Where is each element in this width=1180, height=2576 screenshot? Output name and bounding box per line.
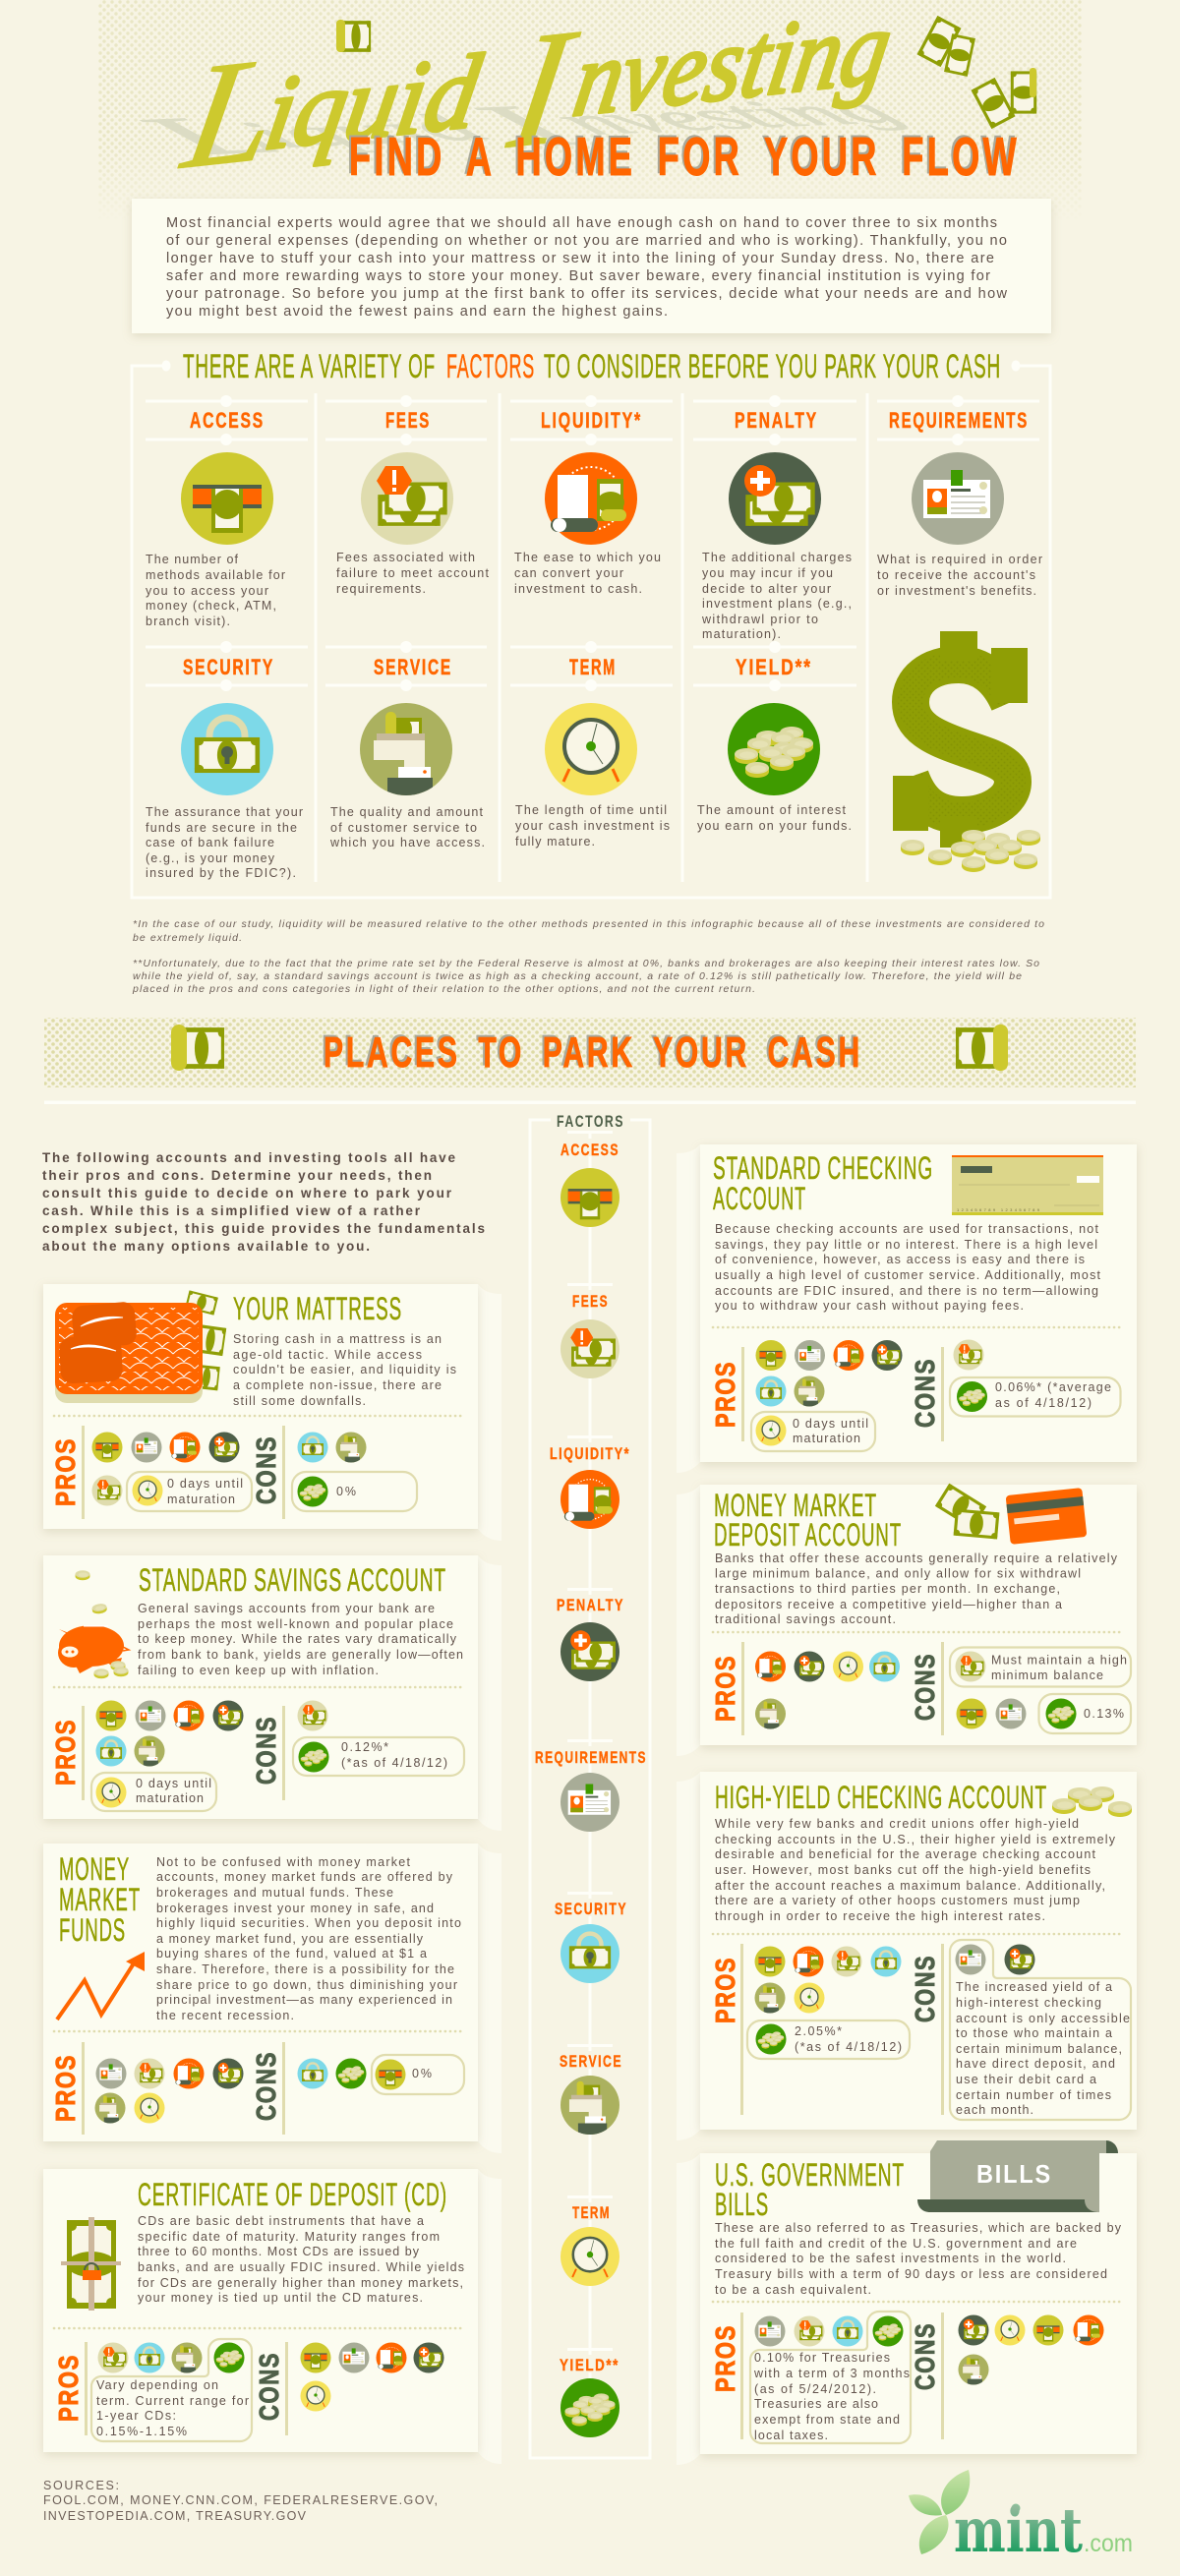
description: checking accounts in the U.S., their higher yield is extremely [715, 1833, 1116, 1846]
description: transactions to third parties per month. In exchange, [715, 1582, 1060, 1596]
legend: requirements [534, 1739, 648, 1832]
heading: ACCOUNT [713, 1181, 806, 1216]
legend: access [560, 1131, 620, 1227]
intro text box: safer and more rewarding ways to store your money. But saver beware, every financial institution is vying for [166, 268, 990, 284]
icon: coins [1052, 1786, 1132, 1817]
factor: access: The number of [146, 553, 239, 566]
section banner: places to park your cash: PLACES TO PARK YOUR CASH [324, 1028, 862, 1077]
heading: STANDARD SAVINGS ACCOUNT [139, 1562, 446, 1598]
sources: INVESTOPEDIA.COM, TREASURY.GOV [43, 2509, 307, 2523]
pros: PROS [50, 1437, 81, 1506]
factors column legend [530, 1112, 650, 2458]
description: a money market fund, you are essentially [156, 1932, 424, 1946]
cons: 0.06%* (*average [995, 1380, 1111, 1394]
legend: security: SECURITY [555, 1901, 627, 1918]
factor: penalty: maturation). [702, 627, 781, 641]
pros: 0 days until [136, 1777, 211, 1790]
factor: penalty: The additional charges [702, 551, 852, 564]
section banner: places to park your cash: PLACES TO PARK YOUR CASH [322, 1026, 860, 1075]
factor: requirements: What is required in order [877, 553, 1042, 566]
factor: penalty: decide to alter your [702, 582, 831, 596]
panel: money market funds [43, 1844, 502, 2153]
icon: floating bills left [336, 20, 371, 52]
cons: CONS [251, 2051, 281, 2121]
factor: security: SECURITY [183, 655, 274, 679]
factor: term: The length of time until [515, 803, 667, 817]
section banner: places to park your cash [44, 1018, 1136, 1087]
cons: CONS [254, 2352, 284, 2421]
title shadow: I [425, 93, 633, 158]
pros [710, 1944, 910, 2115]
heading: BILLS [715, 2187, 769, 2222]
heading [59, 1851, 141, 1948]
cons: high-interest checking [956, 1996, 1101, 2010]
pros: maturation [136, 1791, 204, 1805]
factor: access: you to access your [146, 584, 268, 598]
legend: access: ACCESS [560, 1142, 620, 1159]
pros: maturation [167, 1493, 235, 1506]
title shadow [93, 80, 959, 172]
cons [910, 1642, 1131, 1735]
pros: exempt from state and [754, 2413, 900, 2427]
factor: access [146, 408, 285, 628]
cons [251, 1700, 464, 1800]
factor: term: TERM [569, 655, 617, 679]
sources: SOURCES: [43, 2479, 119, 2492]
factor: liquidity [514, 408, 661, 596]
factor: liquidity: LIQUIDITY* [541, 408, 642, 433]
pros [710, 2312, 911, 2443]
title: Liquid Investing [169, 0, 905, 219]
legend: penalty: PENALTY [557, 1597, 624, 1614]
description: Banks that offer these accounts generally require a relatively [715, 1551, 1118, 1565]
factor: access: money (check, ATM, [146, 599, 276, 613]
description: Because checking accounts are used for transactions, not [715, 1222, 1099, 1236]
cons: account is only accessible [956, 2012, 1130, 2025]
panel: your mattress [43, 1284, 502, 1541]
pros: term. Current range for [96, 2394, 249, 2408]
factor: access: ACCESS [190, 408, 265, 433]
cons [910, 1940, 1131, 2120]
description: you to withdraw your cash without paying fees. [715, 1299, 1024, 1313]
factor: term [515, 655, 670, 849]
factor: security: (e.g., is your money [146, 851, 275, 865]
factor: access: methods available for [146, 568, 285, 582]
pros: with a term of 3 months [753, 2367, 910, 2380]
title shadow: L [93, 105, 318, 165]
pros: maturation [793, 1432, 860, 1445]
pros [710, 1642, 900, 1735]
legend: term [560, 2195, 620, 2286]
description: three to 60 months. Most CDs are issued by [138, 2245, 420, 2258]
title: Liquid Investing: iquid [258, 33, 488, 173]
factor: fees: FEES [385, 408, 431, 433]
description: to be a cash equivalent. [715, 2283, 871, 2297]
pros: 0 days until [793, 1417, 868, 1431]
intro text box: Most financial experts would agree that we should all have enough cash on hand to cover three to six months [166, 215, 997, 231]
panel: standard checking account [677, 1144, 1137, 1473]
icon: floating bills lower right [971, 68, 1036, 129]
description: perhaps the most well-known and popular place [138, 1617, 453, 1631]
heading: MONEY [59, 1851, 130, 1887]
factor: security: insured by the FDIC?). [146, 866, 296, 880]
factors frame [132, 362, 1050, 898]
factor: yield: YIELD** [736, 655, 812, 679]
description: savings, they pay little or no interest. There is a high level [715, 1238, 1097, 1252]
description: specific date of maturity. Maturity ranges from [138, 2230, 440, 2244]
description: there are a variety of other hoops customers must jump [715, 1894, 1080, 1907]
cons: each month. [956, 2103, 1033, 2117]
title shadow: nvesting [518, 89, 928, 143]
heading [714, 1488, 902, 1552]
description [715, 1222, 1101, 1313]
pros: 0.10% for Treasuries [754, 2351, 890, 2365]
sources [43, 2479, 438, 2523]
description: to keep money. While the rates vary dramatically [138, 1632, 457, 1646]
description [715, 1551, 1118, 1626]
left intro text: about the many options available to you. [42, 1239, 370, 1254]
heading: FUNDS [59, 1912, 126, 1948]
description: large minimum balance, and only allow for six withdrawl [715, 1567, 1081, 1581]
pros: 2.05%* [795, 2024, 842, 2038]
heading: variety of factors: THERE ARE A VARIETY OF [183, 348, 436, 385]
left intro text: cash. While this is a simplified view of a rather [42, 1203, 421, 1218]
description: depositors receive a competitive yield—higher than a [715, 1598, 1062, 1611]
factor: liquidity: The ease to which you [514, 551, 661, 564]
factor: security: funds are secure in the [146, 821, 297, 835]
description [138, 1602, 463, 1677]
cons: as of 4/18/12) [995, 1396, 1092, 1410]
legend: security [553, 1892, 629, 1983]
icon: bills banner [917, 2140, 1118, 2212]
panel: U.S. government bills [677, 2140, 1137, 2465]
description: banks, and are usually FDIC insured. While yields [138, 2260, 464, 2274]
pros: PROS [50, 1719, 81, 1786]
factor: security: The assurance that your [146, 805, 303, 819]
description: accounts are FDIC insured, and there is no term—allowing [715, 1284, 1098, 1298]
description: Not to be confused with money market [156, 1855, 411, 1869]
cons: Must maintain a high [991, 1654, 1127, 1668]
description: buying shares of the fund, valued at $1 a [156, 1947, 427, 1961]
description: couldn't be easier, and liquidity is [233, 1363, 456, 1376]
description: after the account reaches a maximum balance. Additionally, [715, 1879, 1105, 1893]
pros [50, 1426, 252, 1519]
description: desirable and beneficial for the average checking account [715, 1847, 1096, 1861]
cons [251, 1426, 417, 1519]
mint.com logo [909, 2470, 1133, 2566]
factor: liquidity: investment to cash. [514, 582, 642, 596]
pros: PROS [50, 2054, 81, 2122]
panel: standard savings account [43, 1555, 502, 1831]
legend: liquidity: LIQUIDITY* [550, 1445, 630, 1463]
pros: (*as of 4/18/12) [795, 2040, 902, 2054]
legend: requirements: REQUIREMENTS [535, 1749, 647, 1767]
cons: certain minimum balance, [956, 2042, 1122, 2056]
intro text box: of our general expenses (depending on whether or not you are married and who is working). Thankfully, you no [166, 233, 1007, 249]
legend: liquidity [547, 1435, 633, 1529]
heading: STANDARD CHECKING [713, 1150, 933, 1186]
cons [910, 2313, 1104, 2439]
cons [254, 2342, 444, 2435]
description: age-old tactic. While access [233, 1348, 422, 1362]
cons: 0% [412, 2067, 432, 2080]
factor: yield: you earn on your funds. [697, 819, 852, 833]
description: brokerages and mutual funds. These [156, 1886, 393, 1900]
cons: (*as of 4/18/12) [341, 1756, 447, 1770]
factor: yield: The amount of interest [697, 803, 847, 817]
legend: service: SERVICE [560, 2053, 622, 2071]
description: principal investment—as many experienced in [156, 1993, 452, 2007]
cons: CONS [910, 2322, 940, 2390]
description: brokerages invest your money in safe, and [156, 1902, 434, 1915]
heading: MONEY MARKET [714, 1488, 877, 1523]
description: from bank to bank, yields are generally low—often [138, 1648, 463, 1662]
description: share. Therefore, there is a possibility for the [156, 1962, 454, 1976]
description: share price to go down, thus diminishing your [156, 1978, 457, 1992]
title: Liquid Investing: L [172, 26, 289, 202]
panel: high-yield checking account [677, 1772, 1137, 2140]
pros [50, 2042, 244, 2135]
cons [910, 1339, 1121, 1441]
description: still some downfalls. [233, 1394, 366, 1408]
panel: money market deposit account [677, 1484, 1137, 1756]
cons: 0.12%* [341, 1740, 388, 1754]
factor: access: branch visit). [146, 615, 230, 628]
description [138, 2214, 464, 2305]
description: These are also referred to as Treasuries, which are backed by [715, 2221, 1122, 2235]
legend: term: TERM [572, 2204, 611, 2222]
factor: service: The quality and amount [330, 805, 484, 819]
pros: 0 days until [167, 1477, 243, 1491]
description: a complete non-issue, there are [233, 1378, 442, 1392]
description: traditional savings account. [715, 1612, 896, 1626]
description: for CDs are generally higher than money markets, [138, 2276, 463, 2290]
description: of convenience, however, as access is easy and there is [715, 1253, 1085, 1266]
left intro text [42, 1150, 485, 1254]
cons: have direct deposit, and [956, 2057, 1115, 2071]
pros [50, 1700, 244, 1811]
heading [713, 1150, 933, 1216]
factor: security: case of bank failure [146, 836, 274, 849]
pros: PROS [710, 1957, 740, 2023]
description: General savings accounts from your bank are [138, 1602, 435, 1615]
description: user. However, most banks cut off the high-yield benefits [715, 1863, 1091, 1877]
icon: locked certificate bill [61, 2217, 121, 2311]
intro text box: your patronage. So before you jump at the first bank to offer its services, decide what your needs are and how [166, 286, 1008, 302]
icon: bills banner: BILLS [976, 2159, 1052, 2189]
intro text box [132, 199, 1051, 333]
intro text box: longer have to stuff your cash into your mattress or sew it into the lining of your Sunday dress. No, there are [166, 251, 994, 266]
pros: 0.15%-1.15% [96, 2425, 187, 2438]
description [715, 1817, 1116, 1923]
description: While very few banks and credit unions offer high-yield [715, 1817, 1079, 1831]
left intro text: their pros and cons. Determine your needs, then [42, 1168, 432, 1183]
factor: penalty [701, 408, 852, 641]
mint.com logo: .com [1084, 2530, 1133, 2557]
icon: banner bill left [171, 1025, 224, 1071]
footnotes: *In the case of our study, liquidity will be measured relative to the other methods presented in this infographic because all of these investments are considered to [133, 918, 1044, 930]
cons: 0% [336, 1485, 356, 1498]
pros: Treasuries are also [754, 2397, 878, 2411]
description: Storing cash in a mattress is an [233, 1332, 442, 1346]
cons: 0.13% [1084, 1707, 1124, 1721]
description [156, 1855, 461, 2022]
left intro text: consult this guide to decide on where to park your [42, 1186, 452, 1200]
cons: to those who maintain a [956, 2026, 1112, 2040]
panel: certificate of deposit [43, 2169, 502, 2464]
description: your money is tied up until the CD matures. [138, 2291, 423, 2305]
description: failing to even keep up with inflation. [138, 1664, 379, 1677]
description: through in order to receive the high interest rates. [715, 1909, 1045, 1923]
factor: requirements: REQUIREMENTS [889, 408, 1029, 433]
heading [715, 2157, 905, 2222]
factor: penalty: you may incur if you [702, 566, 833, 580]
factor: fees: requirements. [336, 582, 426, 596]
factor: service [329, 655, 485, 849]
heading: CERTIFICATE OF DEPOSIT (CD) [138, 2177, 447, 2212]
description: Treasury bills with a term of 90 days or less are considered [715, 2267, 1107, 2281]
legend: fees: FEES [572, 1293, 609, 1311]
pros [53, 2339, 252, 2441]
footnotes: placed in the pros and cons categories in light of their relation to the other options, and not the current return. [132, 983, 755, 995]
mint.com logo: mint [954, 2494, 1083, 2566]
legend: penalty [555, 1588, 627, 1681]
pros: Vary depending on [96, 2378, 218, 2392]
factor: term: your cash investment is [515, 819, 670, 833]
footnotes [132, 918, 1044, 995]
cons: CONS [910, 1653, 940, 1721]
cons: The increased yield of a [956, 1980, 1112, 1994]
factor: penalty: PENALTY [735, 408, 818, 433]
description: the full faith and credit of the U.S. government and are [715, 2237, 1077, 2251]
factor: term: fully mature. [515, 835, 595, 849]
description [233, 1332, 456, 1408]
factor: service: SERVICE [374, 655, 452, 679]
title shadow: iquid [207, 106, 515, 155]
factor: penalty: investment plans (e.g., [702, 597, 852, 611]
factor: fees: failure to meet account [336, 566, 490, 580]
pros [710, 1340, 903, 1451]
left intro text: complex subject, this guide provides the fundamentals [42, 1221, 485, 1236]
heading: MARKET [59, 1882, 141, 1917]
legend: fees [560, 1283, 620, 1378]
intro text box: you might best avoid the fewest pains and earn the highest gains. [166, 304, 668, 320]
heading: U.S. GOVERNMENT [715, 2157, 905, 2193]
factor: yield [697, 655, 852, 833]
factor: service: of customer service to [330, 821, 477, 835]
factor: fees [336, 408, 490, 596]
factor: service: which you have access. [329, 836, 485, 849]
sources: FOOL.COM, MONEY.CNN.COM, FEDERALRESERVE.GOV, [43, 2493, 438, 2507]
heading: variety of factors: FACTORS [446, 348, 535, 385]
factor: penalty: withdrawl prior to [701, 613, 818, 626]
cons: CONS [251, 1435, 281, 1504]
factors column legend: FACTORS [557, 1112, 624, 1131]
description: considered to be the safest investments in the world. [715, 2252, 1066, 2265]
icon: piggy bank [58, 1570, 129, 1678]
heading: variety of factors [183, 348, 1001, 385]
factor: fees: Fees associated with [336, 551, 475, 564]
cons: minimum balance [991, 1669, 1103, 1682]
factor: requirements [877, 408, 1042, 598]
pros: PROS [710, 1361, 740, 1428]
legend: yield [558, 2348, 622, 2437]
cons: use their debit card a [956, 2073, 1096, 2086]
icon: bills and credit card [935, 1484, 1087, 1545]
cons: CONS [251, 1716, 281, 1785]
cons: CONS [910, 1955, 940, 2022]
pros: local taxes. [754, 2429, 828, 2442]
description: CDs are basic debt instruments that have a [138, 2214, 424, 2228]
cons [251, 2042, 464, 2135]
pros: PROS [53, 2354, 84, 2422]
factor: security [146, 655, 303, 880]
description: the recent recession. [156, 2009, 294, 2022]
footnotes: be extremely liquid. [133, 932, 242, 944]
footnotes: while the yield of, say, a standard savings account is twice as high as a checking account, a rate of 0.12% is still pathetically low. Therefore, the yield will be [133, 970, 1022, 982]
legend: yield: YIELD** [560, 2357, 620, 2374]
icon: floating bills upper right [916, 16, 975, 77]
legend: service [558, 2044, 624, 2136]
description: usually a high level of customer service. Additionally, most [715, 1268, 1101, 1282]
icon: rising arrow [57, 1952, 145, 2020]
description [715, 2221, 1122, 2297]
cons: certain number of times [956, 2088, 1111, 2102]
cons: CONS [910, 1358, 940, 1428]
description: accounts, money market funds are offered by [156, 1870, 453, 1884]
icon: big dollar sign with coins [893, 631, 1040, 872]
left intro text: The following accounts and investing tools all have [42, 1150, 455, 1165]
pros: PROS [710, 1655, 740, 1722]
footnotes: **Unfortunately, due to the fact that the prime rate set by the Federal Reserve is almost at 0%, banks and brokerages are also keeping their interest rates low. So [133, 958, 1039, 969]
icon: paper check: 123456789 123456789 [957, 1207, 1040, 1212]
heading: DEPOSIT ACCOUNT [714, 1517, 902, 1552]
pros: PROS [710, 2324, 740, 2392]
icon: mattress with cash [55, 1290, 226, 1403]
pros: 1-year CDs: [96, 2409, 176, 2423]
icon: paper check [952, 1155, 1103, 1215]
pros: (as of 5/24/2012). [754, 2382, 876, 2396]
icon: banner bill right [956, 1025, 1008, 1071]
factor: liquidity: can convert your [514, 566, 623, 580]
heading: YOUR MATTRESS [233, 1291, 402, 1326]
header band [98, 0, 1082, 222]
factor: requirements: or investment's benefits. [877, 584, 1036, 598]
factor: requirements: to receive the account's [877, 568, 1035, 582]
description: highly liquid securities. When you deposit into [156, 1916, 461, 1930]
